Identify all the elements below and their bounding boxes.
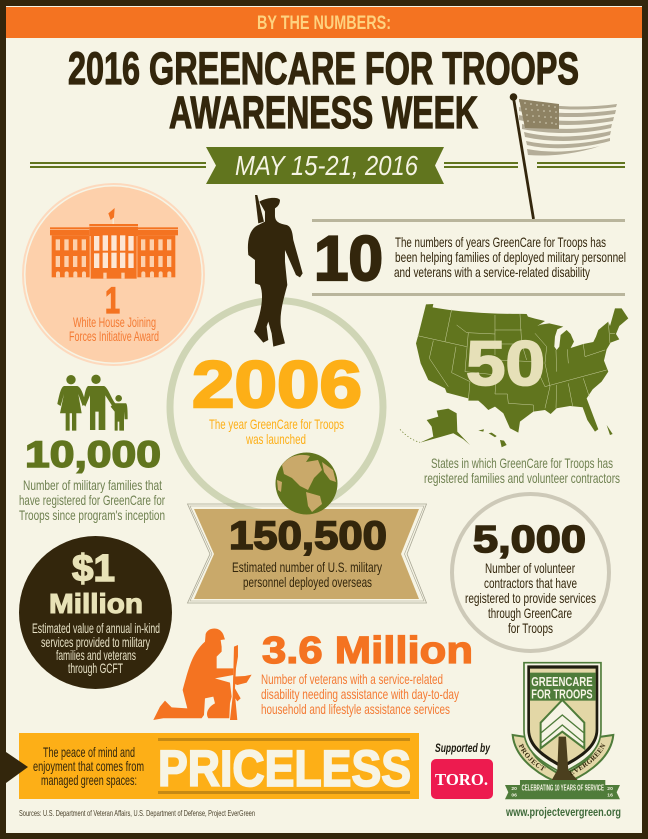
header band: by the numbers: [6, 7, 642, 38]
arrow: priceless pointer: [6, 752, 28, 783]
stat: 2006 launch year: [192, 347, 362, 447]
logo: greencare for troops badge: 20: [607, 786, 613, 792]
number: 1: 1: [105, 280, 120, 321]
text: value description: [32, 620, 160, 676]
text: families description: [19, 477, 165, 523]
text: award caption: White House Joining: [73, 314, 156, 330]
title: AWARENESS WEEK: [169, 87, 478, 138]
panel: 150,500 ribbon: Estimated number of U.S. military: [232, 559, 382, 575]
logo: greencare for troops badge: 20: [511, 786, 517, 792]
text: peace of mind: enjoyment that comes from: [33, 758, 144, 774]
logo: greencare for troops badge: PROJECT: [518, 744, 546, 771]
panel: 150,500 ribbon: 150,500: [229, 514, 387, 558]
icon: kneeling soldier: [153, 629, 252, 720]
stat: 3.6 million veterans: Number of veterans with a service-related: [261, 671, 443, 687]
icon: white house: [50, 208, 178, 279]
logo: greencare for troops badge: 06: [511, 793, 517, 799]
panel: priceless banner: [19, 733, 419, 799]
stat: 2006 launch year: was launched: [245, 431, 306, 447]
panel: $1 million circle: [19, 536, 172, 689]
text: families description: Number of military families that: [23, 477, 162, 493]
logo: greencare for troops badge: 16: [607, 793, 613, 799]
text: peace of mind: The peace of mind and: [43, 744, 135, 760]
stat: 2006 launch year: 2006: [192, 347, 362, 421]
ring: 2006 circle: [170, 300, 383, 514]
panel: 5,000 contractors circle: 5,000: [473, 519, 586, 561]
icon: globe: [276, 452, 338, 514]
text: sources: Sources: U.S. Department of Veteran Affairs, U.S. Department of Defense, Project EverGreen: [19, 808, 255, 818]
sponsor: toro: [431, 741, 493, 799]
text: states description: [424, 455, 620, 486]
text: value description: services provided to military: [41, 634, 150, 650]
text: peace of mind: [33, 744, 144, 788]
logo: greencare for troops badge: EVERGREEN: [569, 743, 606, 776]
logo: greencare for troops badge: [505, 662, 620, 800]
number: 50: 50: [466, 329, 545, 399]
date ribbon: MAY 15-21, 2016: [235, 150, 418, 181]
stat: 10 years: 10: [314, 224, 383, 294]
text: years description: [394, 234, 626, 280]
text: contractors description: Number of volunteer: [485, 560, 575, 576]
panel: priceless banner: PRICELESS: [158, 740, 411, 797]
panel: 150,500 ribbon: [188, 504, 426, 603]
logo: greencare for troops badge: FOR TROOPS: [531, 687, 593, 701]
panel: $1 million circle: Million: [49, 588, 143, 619]
text: contractors description: contractors that have: [484, 575, 577, 591]
logo: greencare for troops badge: GREENCARE: [531, 675, 593, 689]
panel: 150,500 ribbon: personnel deployed overseas: [243, 574, 372, 590]
sponsor: toro: TORO.: [435, 770, 488, 789]
title: [68, 43, 579, 138]
text: families description: have registered for GreenCare for: [19, 492, 165, 508]
stat: 3.6 million veterans: disability needing assistance with day-to-day: [261, 686, 459, 702]
stat: 2006 launch year: The year GreenCare for Troops: [209, 416, 344, 432]
icon: marching soldier: [248, 195, 303, 347]
text: contractors description: registered to provide services: [465, 590, 596, 606]
stat: 3.6 million veterans: 3.6 Million: [262, 630, 473, 672]
text: value description: through GCFT: [68, 660, 123, 676]
text: contractors description: [465, 560, 596, 636]
sponsor: toro: Supported by: [435, 741, 491, 755]
stat: 3.6 million veterans: household and lifestyle assistance services: [261, 701, 450, 717]
stat: 10 years: [314, 224, 626, 294]
icon: american flag: [510, 93, 617, 219]
map: united states: [400, 304, 628, 486]
text: value description: families and veterans: [56, 647, 136, 663]
text: peace of mind: managed green spaces:: [41, 772, 137, 788]
text: award caption: [69, 314, 159, 344]
panel: 5,000 contractors circle: [452, 494, 609, 651]
header band: by the numbers: BY THE NUMBERS:: [257, 13, 391, 34]
text: value description: Estimated value of annual in-kind: [32, 620, 160, 636]
stat: 10,000 families: 10,000: [25, 434, 161, 475]
icon: family: [57, 375, 128, 431]
stat: 10,000 families: [19, 375, 165, 523]
text: award caption: Forces Initiative Award: [69, 328, 159, 344]
panel: $1 million circle: $1: [72, 548, 115, 590]
text: contractors description: through GreenCare: [488, 605, 572, 621]
stat: 3.6 million veterans: [261, 630, 473, 717]
panel: white house award: [22, 183, 205, 366]
text: families description: Troops since program's inception: [19, 507, 165, 523]
text: contractors description: for Troops: [508, 620, 553, 636]
